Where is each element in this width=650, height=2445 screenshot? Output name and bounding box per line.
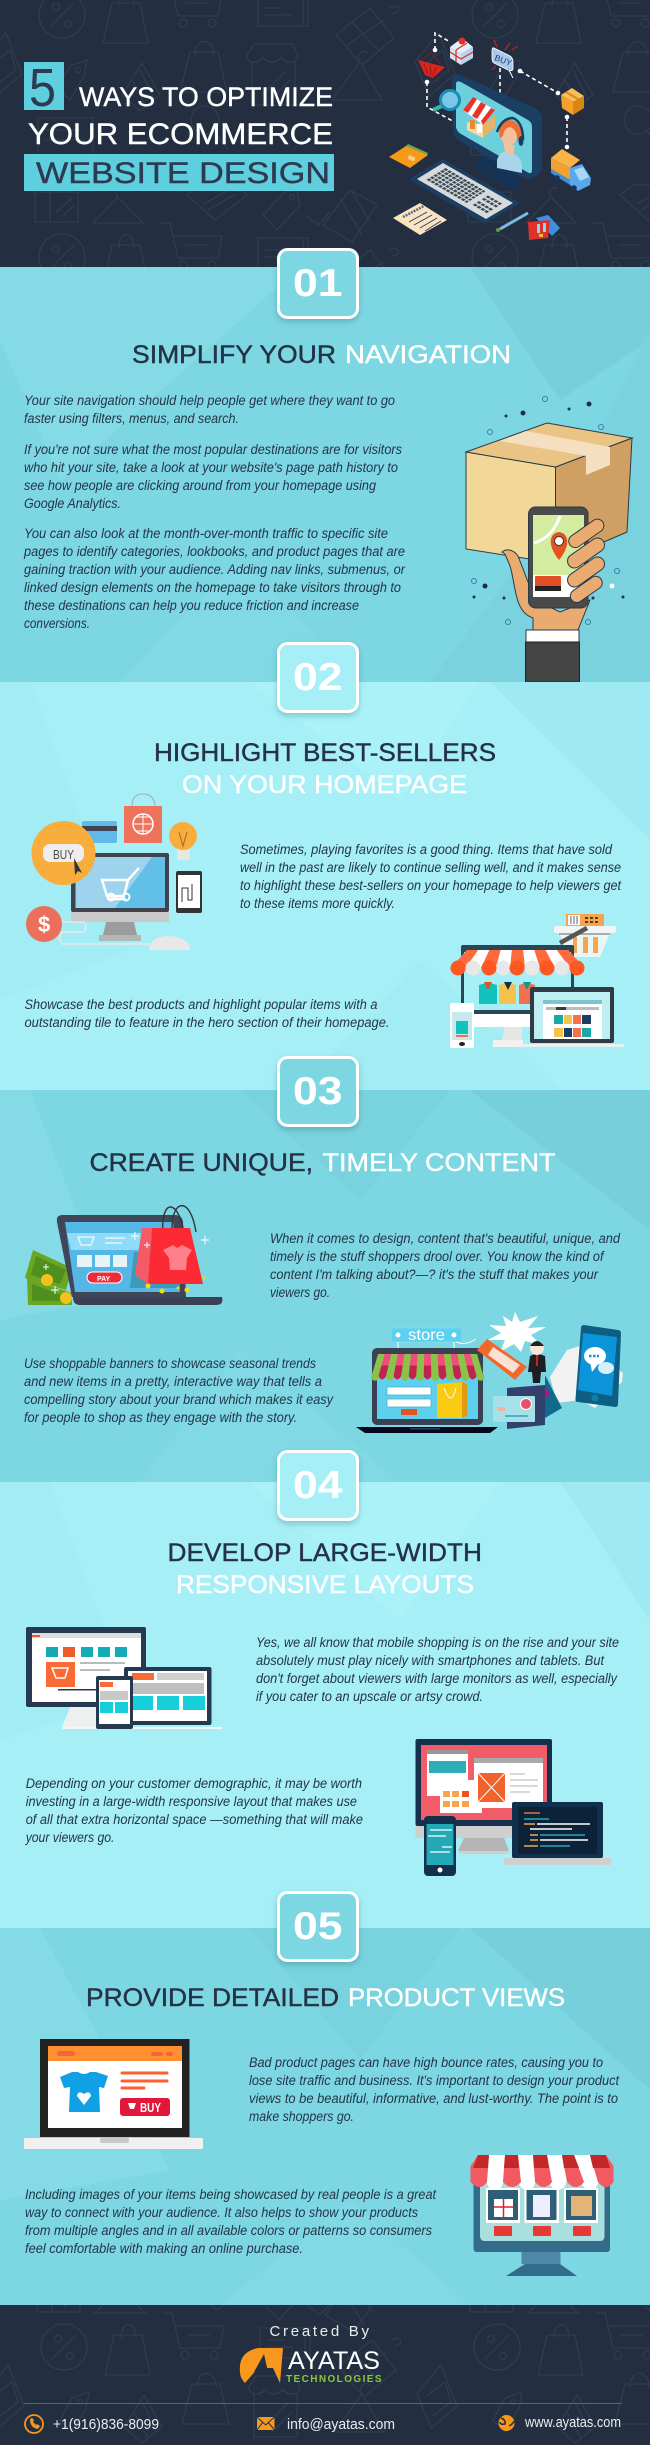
icon: responsive devices right <box>416 1739 612 1876</box>
heading: TIMELY CONTENT <box>322 1149 556 1177</box>
panel: header <box>0 0 650 353</box>
icon: basket <box>418 53 445 78</box>
text block: see how people are clicking around from your homepage using <box>24 478 376 493</box>
text block: Including images of your items being showcased by real people is a great <box>25 2187 437 2202</box>
icon: laptop with shopping bag <box>25 1206 222 1305</box>
icon: responsive storefront <box>450 914 624 1048</box>
panel: section 3 timely content <box>0 1090 650 1482</box>
text block <box>240 842 622 911</box>
text block: outstanding tile to feature in the hero section of their homepage. <box>24 1015 390 1030</box>
text block: make shoppers go. <box>249 2109 354 2124</box>
text block: investing in a large-width responsive layout that makes use <box>26 1794 357 1809</box>
icon: gift <box>450 38 473 65</box>
contact: email: info@ayatas.com <box>287 2416 395 2433</box>
text block: of all that extra horizontal space —something that will make <box>26 1812 363 1827</box>
icon: buy tag <box>492 40 518 82</box>
text block: to highlight these best-sellers on your homepage to help viewers get <box>240 878 622 893</box>
heading: SIMPLIFY YOUR <box>132 341 336 369</box>
text block: timely is the stuff shoppers drool over. You know the kind of <box>270 1249 605 1264</box>
icon: online store with phone <box>356 1312 623 1433</box>
text block: if you cater to an upscale or artsy crowd. <box>256 1689 483 1704</box>
title: YOUR ECOMMERCE <box>28 118 333 151</box>
badge 03: 03 <box>293 1070 342 1113</box>
badge 01: 01 <box>293 262 342 305</box>
heading <box>154 739 496 799</box>
text block <box>24 1356 334 1425</box>
text block: If you're not sure what the most popular destinations are for visitors <box>24 442 402 457</box>
icon: hand holding phone with parcel <box>466 396 632 682</box>
text block: Bad product pages can have high bounce rates, causing you to <box>249 2055 603 2070</box>
text block: Depending on your customer demographic, it may be worth <box>26 1776 362 1791</box>
icon: parcel <box>561 88 584 115</box>
text block: feel comfortable with making an online purchase. <box>25 2241 303 2256</box>
title: WEBSITE DESIGN <box>36 157 330 190</box>
text block <box>256 1635 619 1704</box>
text block: Google Analytics. <box>24 496 121 511</box>
text block: linked design elements on the homepage to take visitors through to <box>24 580 401 595</box>
text block: who hit your site, take a look at your website's page path history to <box>24 460 398 475</box>
text block: your viewers go. <box>25 1830 114 1845</box>
text block <box>25 1776 363 1845</box>
icon: wallet <box>389 144 428 168</box>
heading: CREATE UNIQUE, <box>90 1149 313 1177</box>
text block: for people to shop as they engage with the story. <box>24 1410 297 1425</box>
text block: and new items in a pretty, interactive way that tells a <box>24 1374 322 1389</box>
contact: website: www.ayatas.com <box>524 2414 621 2431</box>
text block: don't forget about viewers with large monitors as well, especially <box>256 1671 618 1686</box>
text block: Yes, we all know that mobile shopping is on the rise and your site <box>256 1635 619 1650</box>
icon: computer with shopping cart <box>26 794 202 950</box>
icon: support agent <box>497 118 524 173</box>
text block: Showcase the best products and highlight popular items with a <box>24 997 378 1012</box>
title: 5 <box>29 58 56 118</box>
heading: DEVELOP LARGE-WIDTH <box>168 1539 482 1567</box>
text block: views to be beautiful, informative, and lust-worthy. The point is to <box>249 2091 618 2106</box>
text block: viewers go. <box>270 1285 330 1300</box>
text block: compelling story about your brand which makes it easy <box>24 1392 334 1407</box>
icon: pen <box>496 213 528 232</box>
title: WAYS TO OPTIMIZE <box>79 82 333 112</box>
badge 04: 04 <box>293 1464 343 1507</box>
heading: ON YOUR HOMEPAGE <box>182 771 467 799</box>
badge 05: 05 <box>293 1905 342 1948</box>
text block: You can also look at the month-over-month traffic to specific site <box>24 526 388 541</box>
logo: TECHNOLOGIES <box>286 2374 382 2385</box>
panel: footer <box>0 2275 650 2445</box>
badge 02 <box>278 644 358 712</box>
heading: RESPONSIVE LAYOUTS <box>176 1571 474 1599</box>
heading: NAVIGATION <box>345 341 511 369</box>
heading <box>132 341 511 369</box>
badge 05 <box>278 1892 358 1960</box>
text block: gaining traction with your audience. Adding nav links, submenus, or <box>24 562 405 577</box>
panel: section 4 responsive layouts <box>0 1482 650 1928</box>
heading <box>168 1539 482 1599</box>
badge 03 <box>278 1058 358 1126</box>
text block <box>249 2055 620 2124</box>
icon: computer with shopping cart: BUY <box>53 847 74 862</box>
created by: Created By <box>270 2323 370 2340</box>
heading <box>86 1984 565 2012</box>
icon: laptop product page <box>24 2039 203 2149</box>
text block: pages to identify categories, lookbooks, and product pages that are <box>23 544 405 559</box>
title <box>24 58 334 191</box>
heading <box>90 1149 556 1177</box>
text block: Sometimes, playing favorites is a good thing. Items that have sold <box>240 842 612 857</box>
badge 01 <box>278 250 358 318</box>
text block <box>23 393 405 631</box>
contact: website <box>498 2414 621 2431</box>
text block: from multiple angles and in all available colors or patterns so consumers <box>25 2223 432 2238</box>
icon: truck <box>551 149 591 191</box>
text block: way to connect with your audience. It also helps to show your products <box>25 2205 418 2220</box>
text block: faster using filters, menus, and search. <box>24 411 239 426</box>
badge 02: 02 <box>293 656 342 699</box>
icon: online storefront monitor <box>470 2155 614 2276</box>
text block: well in the past are likely to continue selling well, and it makes sense <box>240 860 621 875</box>
logo: AYATAS <box>288 2347 380 2375</box>
icon: isometric ecommerce computer <box>389 33 591 240</box>
text block: to these items more quickly. <box>240 896 395 911</box>
panel: section 2 best sellers <box>0 682 650 1090</box>
text block: content I'm talking about?—? it's the stuff that makes your <box>270 1267 598 1282</box>
icon: responsive devices left <box>26 1627 222 1729</box>
heading: PRODUCT VIEWS <box>348 1984 565 2012</box>
text block <box>25 2187 437 2256</box>
contact: phone: +1(916)836-8099 <box>53 2416 159 2433</box>
text block: lose site traffic and business. It's important to design your product <box>249 2073 620 2088</box>
text block: conversions. <box>24 616 90 631</box>
text block: Your site navigation should help people get where they want to go <box>24 393 395 408</box>
panel: section 1 simplify navigation <box>0 267 650 682</box>
icon: online store with phone: store <box>408 1327 445 1344</box>
text block <box>24 997 390 1030</box>
badge 04 <box>278 1452 358 1520</box>
text block: absolutely must play nicely with smartphones and tablets. But <box>256 1653 605 1668</box>
text block: When it comes to design, content that's beautiful, unique, and <box>270 1231 620 1246</box>
icon: computer with shopping cart: $ <box>38 912 50 937</box>
heading: HIGHLIGHT BEST-SELLERS <box>154 739 496 767</box>
panel: section 5 product views <box>0 1928 650 2305</box>
icon: credit cards <box>528 215 560 240</box>
heading: PROVIDE DETAILED <box>86 1984 339 2012</box>
icon: laptop product page: BUY <box>140 2100 161 2115</box>
icon: buy tag: BUY <box>493 52 513 68</box>
icon: magnifier <box>433 90 460 110</box>
icon: laptop with shopping bag: PAY <box>97 1276 111 1283</box>
text block: these destinations can help you reduce friction and increase <box>24 598 359 613</box>
icon: checklist <box>393 203 447 235</box>
logo <box>240 2347 382 2385</box>
text block <box>270 1231 620 1300</box>
text block: Use shoppable banners to showcase seasonal trends <box>24 1356 316 1371</box>
icon: store in screen <box>463 97 495 138</box>
